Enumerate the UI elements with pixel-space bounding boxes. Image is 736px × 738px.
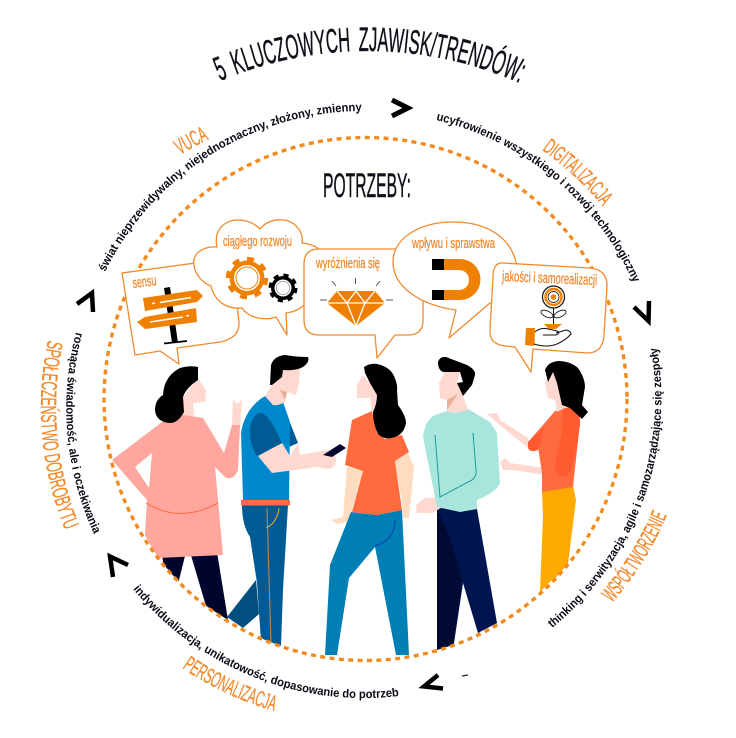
bubble: wpływu i sprawstwa bbox=[393, 222, 520, 338]
icon: flower in hand bbox=[525, 286, 571, 346]
trend: Społeczeństwo dobrobytu description: rosnąca świadomość, ale i oczekiwania bbox=[66, 332, 100, 534]
arrow: top chevron bbox=[392, 100, 408, 116]
arrow: right chevron bbox=[634, 301, 649, 321]
bubble: jakości i samorealizacji bbox=[490, 263, 607, 372]
icon: signpost bbox=[137, 287, 203, 344]
small text remnant bbox=[462, 675, 468, 676]
bubble label: wpływu i sprawstwa: wpływu i sprawstwa bbox=[411, 235, 495, 252]
trend: Współtworzenie heading: WSPÓŁTWORZENIE bbox=[600, 510, 667, 602]
title: 5 KLUCZOWYCH ZJAWISK/TRENDÓW: bbox=[212, 27, 526, 83]
bubble label: jakości i samorealizacji: jakości i samorealizacji bbox=[501, 268, 597, 289]
trend: Personalizacja description: indywidualizacja, unikatowość, dopasowanie do potrzeb bbox=[134, 584, 398, 700]
person 3: woman in orange t-shirt bbox=[325, 364, 414, 655]
infographic canvas: POTRZEBY: bbox=[323, 167, 411, 205]
bubble label: ciągłego rozwoju: ciągłego rozwoju bbox=[223, 233, 292, 250]
trend: Personalizacja heading: PERSONALIZACJA bbox=[182, 656, 276, 712]
person 2: man in blue t-shirt bbox=[227, 355, 346, 646]
trend: Digitalizacja description: ucyfrowienie wszystkiego i rozwój technologiczny bbox=[437, 114, 640, 281]
people group, clipped by the circle bbox=[112, 355, 588, 655]
trend: VUCA heading: VUCA bbox=[172, 127, 210, 154]
bubble label: sensu: sensu bbox=[131, 272, 157, 292]
arrow: bottom-left chevron bbox=[110, 556, 128, 577]
icon: magnet bbox=[432, 259, 480, 300]
bubble label: wyróżnienia się: wyróżnienia się bbox=[315, 255, 380, 272]
icon: gears bbox=[228, 259, 296, 300]
person 4: man in mint sweater bbox=[416, 357, 500, 650]
trend: VUCA description: świat nieprzewidywalny, niejednoznaczny, złożony, zmienny bbox=[98, 104, 362, 271]
arrow: left chevron bbox=[77, 293, 93, 312]
person 5: woman with yellow skirt bbox=[487, 361, 588, 592]
arrow: bottom chevron bbox=[424, 675, 443, 688]
dotted orange circle bbox=[104, 138, 627, 660]
trend: Współtworzenie description: thinking i serwityzacja, agile i samozarządzające się zespoły bbox=[548, 348, 664, 627]
person 1: woman in pink bbox=[112, 366, 242, 620]
icon: diamond bbox=[320, 278, 393, 326]
infographic canvas bbox=[40, 27, 667, 712]
bubble: ciągłego rozwoju bbox=[194, 220, 320, 335]
trend: Digitalizacja heading: DIGITALIZACJA bbox=[542, 138, 612, 207]
trend: Społeczeństwo dobrobytu heading: SPOŁECZEŃSTWO DOBROBYTU bbox=[40, 341, 79, 528]
bubble: sensu bbox=[122, 258, 239, 364]
bubble: wyróżnienia się bbox=[304, 249, 423, 358]
